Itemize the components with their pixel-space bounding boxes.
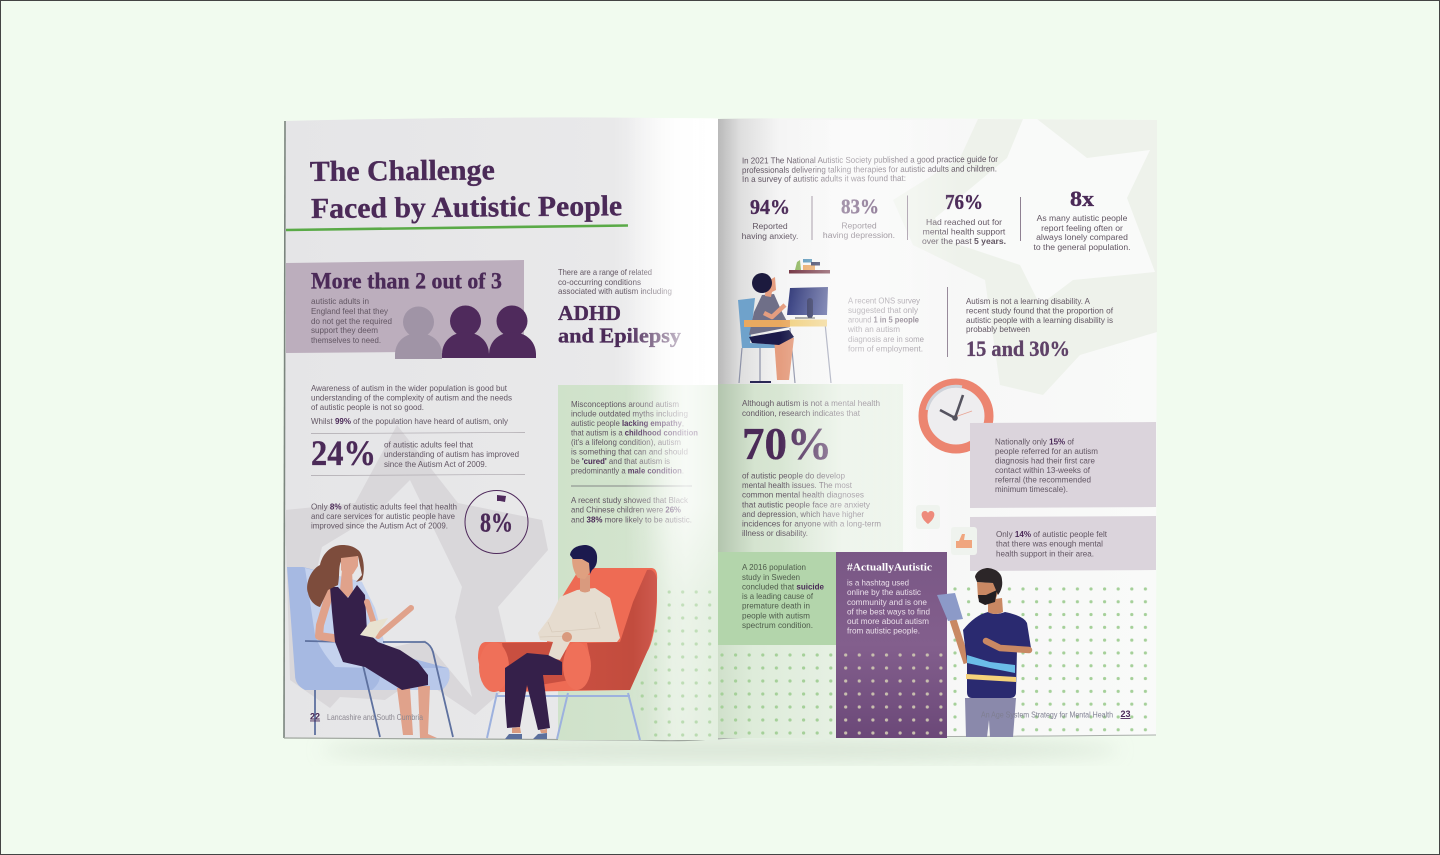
misconceptions text: be 'cured' and that autism is (571, 456, 670, 466)
text: ONS survey (847, 296, 924, 354)
panel: 15% referral (970, 422, 1156, 508)
text: awareness (311, 383, 512, 426)
gutter highlight (625, 118, 718, 740)
page number left: 22 (310, 712, 320, 722)
text: ONS survey: suggested that only (848, 305, 919, 315)
stat: 24%: of autistic adults feel that (384, 440, 474, 450)
panel: 15% referral: diagnosis had their first care (995, 456, 1095, 466)
70% text: illness or disability. (742, 528, 808, 538)
stat: 24%: 24% (311, 433, 376, 473)
panel: 70% (718, 384, 903, 552)
stat: 76%: over the past 5 years. (922, 236, 1006, 246)
panel: 14% support: that there was enough mental (996, 538, 1103, 548)
panel: sweden study: concluded that suicide (742, 582, 824, 592)
panel: 70%: Although autism is not a mental health (742, 398, 880, 408)
panel: 70%: condition, research indicates that (742, 408, 861, 418)
stat: 8x (1034, 186, 1130, 252)
recent study text: A recent study showed that Black (571, 495, 689, 505)
stat: 8x: As many autistic people (1037, 213, 1128, 223)
stat: 24% (311, 432, 525, 476)
panel: ActuallyAutistic (836, 552, 947, 738)
panel: sweden study: people with autism (742, 610, 810, 620)
panel: ActuallyAutistic: community and is one (847, 597, 927, 607)
70% text: common mental health diagnoses (742, 490, 864, 500)
panel: 14% support: Only 14% of autistic people felt (996, 529, 1108, 539)
panel: 14% support (970, 516, 1156, 571)
stat: 94%: 94% (750, 195, 790, 219)
70% number: 70% (742, 418, 832, 469)
right page (718, 118, 1157, 739)
stat: 83%: 83% (841, 194, 879, 218)
page number right: 23 (1120, 709, 1131, 719)
recent study text: and Chinese children were 26% (571, 504, 681, 514)
stat: 76% (922, 190, 1006, 246)
panel: ActuallyAutistic: #ActuallyAutistic (847, 562, 932, 574)
stat: 83% (823, 194, 895, 240)
text: co-occurring conditions: co-occurring conditions (558, 277, 641, 287)
stat: 76%: 76% (945, 190, 983, 214)
decorative star (285, 425, 548, 715)
text: learning disability: recent study found that the proportion of (966, 306, 1114, 316)
title underline (286, 226, 628, 230)
text: co-occurring conditions: There are a range of related (558, 267, 652, 277)
panel: more than 2 out of 3 (286, 260, 536, 359)
text: co-occurring conditions: and Epilepsy (558, 324, 682, 348)
text: learning disability: 15 and 30% (966, 336, 1070, 361)
intro text: professionals delivering talking therapies for autistic adults and children. (742, 163, 997, 175)
icon: clock (923, 383, 989, 449)
stat text: autistic adults in (311, 296, 369, 306)
stat text: themselves to need. (311, 335, 381, 345)
stat text: support they deem (311, 325, 378, 335)
text: ONS survey: A recent ONS survey (848, 296, 921, 306)
text: ONS survey: around 1 in 5 people (848, 314, 919, 324)
panel: 15% referral: referral (the recommended (995, 474, 1091, 484)
stat text (311, 296, 392, 345)
misconceptions text: Misconceptions around autism (571, 399, 679, 409)
misconceptions text: (it's a lifelong condition), autism (571, 437, 681, 447)
text: co-occurring conditions: ADHD (558, 301, 621, 325)
text: co-occurring conditions: associated with autism including (558, 286, 672, 296)
text: awareness: of autistic people is not so good. (311, 402, 424, 412)
intro text: In 2021 The National Autistic Society published a good practice guide for (742, 154, 998, 166)
panel: sweden study: A 2016 population (742, 562, 806, 572)
text: only 8%: improved since the Autism Act of 2009. (311, 520, 448, 530)
misconceptions text: include outdated myths including (571, 408, 688, 418)
misconceptions text: predominantly a male condition. (571, 466, 684, 476)
stat: 76%: mental health support (923, 226, 1006, 236)
stat: 76%: Had reached out for (926, 217, 1002, 227)
icon: thumbs up (951, 527, 977, 555)
dot field (952, 586, 1149, 735)
panel: ActuallyAutistic: of the best ways to find (847, 606, 930, 616)
stat: 83%: Reported (841, 220, 877, 230)
title (310, 153, 622, 225)
panel: ActuallyAutistic: online by the autistic (847, 587, 922, 597)
stat: 8x: 8x (1070, 186, 1094, 211)
text: ONS survey: diagnosis are in some (848, 334, 924, 344)
text: awareness: Whilst 99% of the population have heard of autism, only (311, 416, 509, 426)
70% text: incidences for anyone with a long-term (742, 518, 881, 528)
text: ONS survey: with an autism (847, 324, 900, 334)
misconceptions text: that autism is a childhood condition (571, 428, 698, 438)
text: only 8%: Only 8% of autistic adults feel that health (311, 502, 457, 512)
intro text (742, 154, 998, 184)
title: The Challenge (310, 154, 495, 188)
panel: ActuallyAutistic: out more about autism (847, 616, 929, 626)
text fade over spread centre (780, 120, 960, 552)
decorative star (893, 119, 1157, 395)
text: learning disability: Autism is not a learning disability. A (966, 296, 1090, 306)
panel: sweden study: is a leading cause of (742, 591, 814, 601)
stat: 94%: having anxiety. (742, 231, 798, 241)
panel: sweden study: study in Sweden (742, 572, 800, 582)
panel: 15% referral: Nationally only 15% of (995, 436, 1075, 446)
text: only 8% (311, 502, 457, 530)
panel: 14% support: health support in their area. (996, 548, 1094, 558)
stat: 8x: to the general population. (1034, 242, 1130, 252)
recent study text: and 38% more likely to be autistic. (571, 514, 692, 524)
misconceptions text (571, 399, 698, 476)
panel: sweden study: premature death in (742, 600, 810, 610)
70% text: and depression, which have higher (742, 509, 864, 519)
stat: 24%: since the Autism Act of 2009. (384, 459, 487, 469)
panel: ActuallyAutistic: is a hashtag used (847, 578, 909, 588)
stat: 83%: having depression. (823, 230, 895, 240)
icon: three people (395, 306, 536, 359)
intro text: In a survey of autistic adults it was found that: (742, 173, 906, 184)
70% text (742, 470, 881, 538)
recent study text (571, 495, 692, 524)
text: awareness: Awareness of autism in the wider population is good but (311, 383, 508, 393)
page number left (310, 712, 423, 722)
text: co-occurring conditions (558, 267, 682, 348)
text: only 8%: and care services for autistic people have (311, 511, 455, 521)
page number left: Lancashire and South Cumbria (327, 712, 423, 722)
page number right: An Age System Strategy for Mental Health (981, 710, 1113, 720)
stat heading: More than 2 out of 3 (311, 268, 502, 294)
stat: 24%: understanding of autism has improved (384, 449, 519, 459)
panel: sweden study: spectrum condition. (742, 620, 813, 630)
illustration: woman in chair (287, 545, 453, 738)
book shadow (320, 737, 1120, 763)
text: ONS survey: form of employment. (848, 344, 923, 354)
panel: ActuallyAutistic: from autistic people. (847, 626, 920, 636)
stat: 8% dial (465, 490, 528, 554)
70% text: mental health issues. The most (742, 480, 853, 490)
panel: 15% referral: minimum timescale). (995, 484, 1068, 494)
stat: 8x: always lonely compared (1036, 232, 1128, 242)
title: Faced by Autistic People (311, 190, 622, 225)
stat: 8x: report feeling often or (1041, 223, 1123, 233)
panel: 15% referral: contact within 13-weeks of (995, 465, 1091, 475)
left page (284, 117, 718, 741)
icon: heart (916, 505, 940, 529)
stat: 8% dial: 8% (480, 508, 513, 538)
illustration: woman at desk (738, 259, 831, 383)
illustration: man in armchair (478, 545, 657, 740)
misconceptions text: autistic people lacking empathy, (571, 418, 684, 428)
text: learning disability (966, 296, 1114, 361)
stat text: do not get the required (311, 316, 392, 326)
illustration: man with tablet (937, 568, 1031, 737)
misconceptions text: is something that can and should (571, 446, 688, 456)
panel: 15% referral: people referred for an autism (995, 446, 1098, 456)
text: awareness: understanding of the complexity of autism and the needs (311, 392, 512, 402)
70% text: that autistic people face are anxiety (742, 500, 871, 510)
70% text: of autistic people do develop (742, 470, 845, 480)
panel: sweden study (718, 552, 836, 738)
text: learning disability: probably between (966, 324, 1030, 334)
stat text: England feel that they (311, 306, 389, 316)
stat: 94% (742, 195, 798, 241)
text: learning disability: autistic people with a learning disability is (966, 315, 1113, 325)
panel: misconceptions (558, 385, 718, 740)
stat: 94%: Reported (752, 221, 788, 231)
